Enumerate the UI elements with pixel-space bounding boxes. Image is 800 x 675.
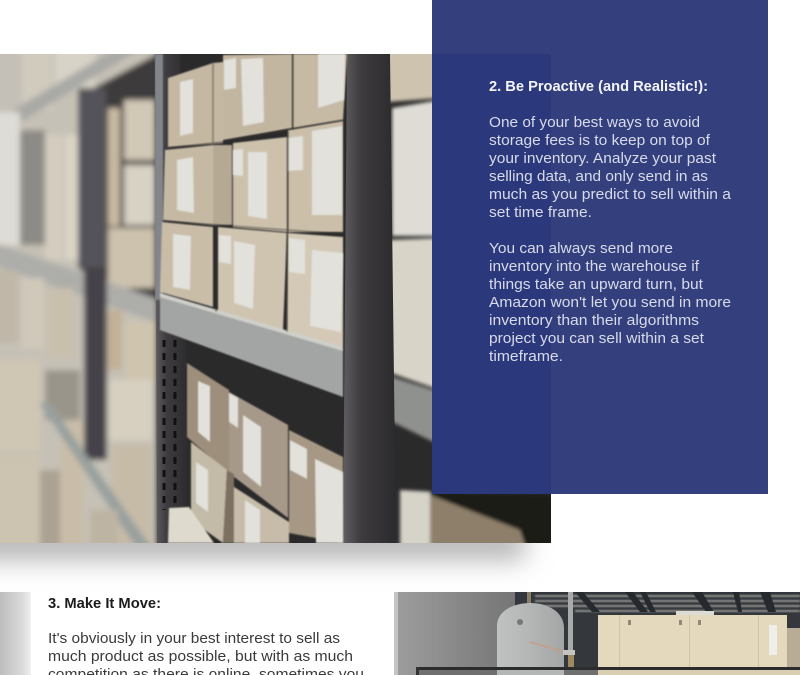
railing and lower panels xyxy=(416,667,800,675)
heading: Make It Move: 3. Make It Move: xyxy=(48,595,161,612)
paragraph: sending more inventory: inventory than their algorithms xyxy=(489,312,699,329)
lights xyxy=(676,611,714,615)
shadow under warehouse photo xyxy=(0,526,525,560)
beige unit xyxy=(598,615,787,667)
paragraph: sell product: much product as possible, but with as much xyxy=(48,648,353,665)
shadow lines between boxes xyxy=(163,54,343,332)
cardboard boxes xyxy=(160,54,347,543)
pipe xyxy=(568,592,573,650)
paragraph: sell product: It's obviously in your best interest to sell as xyxy=(48,630,340,647)
paragraph: avoid storage fees: selling data, and only send in as xyxy=(489,168,708,185)
tank xyxy=(497,592,564,675)
paragraph: sending more inventory: timeframe. xyxy=(489,348,563,365)
warehouse shelving photo xyxy=(0,54,551,543)
paragraph: sending more inventory xyxy=(489,240,731,365)
metal posts xyxy=(155,54,396,543)
paragraph: sending more inventory: You can always send more xyxy=(489,240,673,257)
navy text panel xyxy=(432,0,768,494)
paragraph: sending more inventory: inventory into the warehouse if xyxy=(489,258,700,275)
paragraph: sending more inventory: Amazon won't let you send in more xyxy=(489,294,731,311)
warehouse equipment photo xyxy=(398,592,800,675)
paragraph: avoid storage fees: much as you predict to sell within a xyxy=(489,186,732,203)
paragraph: sending more inventory: things take an upward turn, but xyxy=(489,276,704,293)
box labels xyxy=(173,54,345,543)
paragraph: avoid storage fees xyxy=(489,114,732,221)
paragraph: sell product xyxy=(48,630,364,675)
text block: Make It Move xyxy=(48,595,364,675)
left image edge xyxy=(0,592,31,675)
paragraph: avoid storage fees: One of your best ways to avoid xyxy=(489,114,700,131)
paragraph: avoid storage fees: your inventory. Analyze your past xyxy=(489,150,717,167)
paragraph: sending more inventory: project you can sell within a set xyxy=(489,330,705,347)
paragraph: avoid storage fees: storage fees is to keep on top of xyxy=(489,132,711,149)
paragraph: avoid storage fees: set time frame. xyxy=(489,204,592,221)
right photo edge xyxy=(394,592,398,675)
heading: Be Proactive: 2. Be Proactive (and Realistic!): xyxy=(489,78,708,95)
